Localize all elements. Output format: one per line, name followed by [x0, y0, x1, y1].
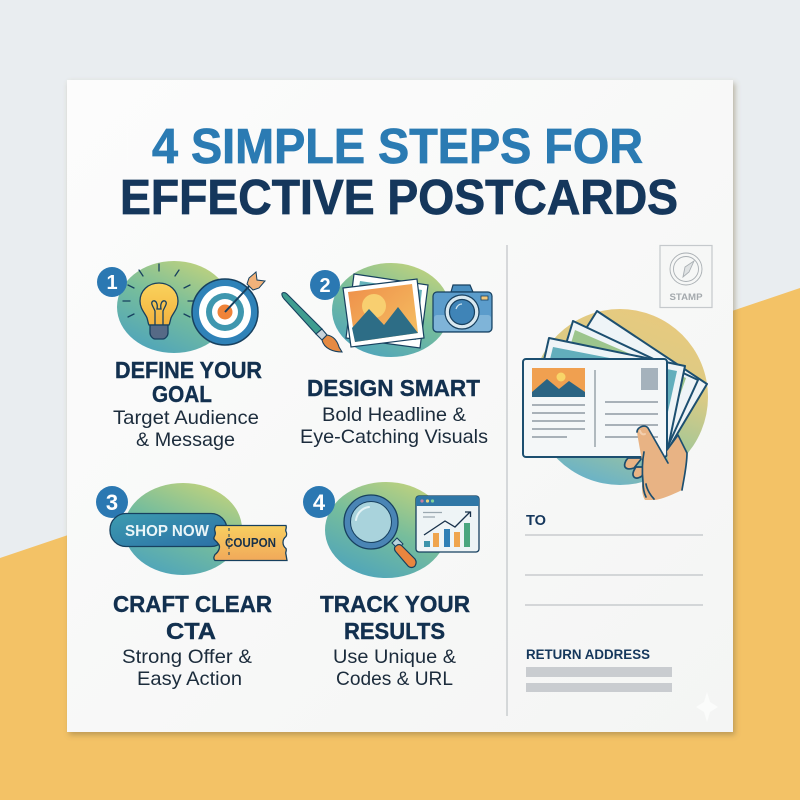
step 1 heading: GOAL: [152, 381, 212, 407]
icon: analytics window: [416, 496, 479, 552]
step 3 number badge: [96, 486, 128, 518]
title line 1: 4 SIMPLE STEPS FOR: [152, 120, 643, 174]
step 4 heading: RESULTS: [344, 618, 445, 644]
step 2 description: Eye-Catching Visuals: [300, 426, 488, 448]
step 1 number badge: [97, 267, 127, 297]
step 1 description: [113, 407, 259, 451]
step 3 background blob: [124, 483, 242, 575]
step 3 number badge: 3: [106, 490, 118, 515]
icon: compass: [670, 253, 702, 285]
address section: [525, 513, 703, 692]
illustration background circle: [532, 309, 708, 485]
front postcard: [523, 359, 667, 457]
step 2 description: [300, 404, 488, 448]
step 4 heading: [320, 591, 470, 644]
icon: shop now button: [110, 514, 227, 546]
step 1 description: & Message: [136, 429, 235, 451]
step 3 description: Easy Action: [137, 668, 242, 690]
step 2 description: Bold Headline &: [322, 404, 466, 426]
title: [120, 120, 678, 225]
background yellow band: [0, 288, 800, 800]
step 3 heading: CTA: [166, 618, 216, 644]
illustration: postcards in hand: [523, 309, 708, 500]
return address bars: [526, 667, 672, 692]
address lines: [525, 535, 703, 605]
step 3: craft clear cta: [96, 483, 287, 690]
step 1 background blob: [117, 261, 231, 353]
hand: [625, 426, 687, 500]
step 2 background blob: [332, 263, 450, 357]
icon: shop now button: SHOP NOW: [125, 523, 210, 540]
icon: paintbrush: [282, 293, 342, 352]
icon: photo stack: [343, 274, 428, 348]
step 4 number badge: 4: [313, 490, 326, 515]
step 4 heading: TRACK YOUR: [320, 591, 470, 617]
to label: TO: [526, 513, 546, 529]
step 2: design smart: [282, 263, 492, 448]
step 4 background blob: [325, 482, 447, 578]
icon: coupon ticket: [214, 526, 287, 560]
stamp label: STAMP: [670, 292, 703, 303]
step 2 heading: DESIGN SMART: [307, 375, 481, 401]
step 2 number badge: [310, 270, 340, 300]
step 1 heading: DEFINE YOUR: [115, 357, 262, 383]
step 2 number badge: 2: [319, 275, 331, 297]
step 1: define your goal: [97, 261, 265, 451]
icon: light bulb: [123, 264, 195, 339]
step 3 description: [122, 646, 252, 690]
step 4 number badge: [303, 486, 335, 518]
fanned postcards: [535, 311, 707, 448]
sparkle mark: [696, 692, 718, 722]
icon: target: [192, 272, 265, 345]
step 1 number badge: 1: [106, 272, 118, 294]
step 3 description: Strong Offer &: [122, 646, 252, 668]
title line 2: EFFECTIVE POSTCARDS: [120, 171, 678, 225]
step 4 description: Codes & URL: [336, 668, 453, 690]
step 1 heading: [115, 357, 262, 407]
icon: magnifying glass: [344, 495, 416, 568]
icon: coupon ticket: COUPON: [225, 536, 276, 550]
icon: camera: [433, 285, 492, 332]
return address label: RETURN ADDRESS: [526, 647, 650, 662]
step 3 heading: [113, 591, 272, 644]
step 1 description: Target Audience: [113, 407, 259, 429]
stamp box: [660, 246, 712, 308]
step 4: track your results: [303, 482, 479, 690]
step 3 heading: CRAFT CLEAR: [113, 591, 272, 617]
step 4 description: [333, 646, 456, 690]
postcard panel: [67, 80, 733, 732]
step 4 description: Use Unique &: [333, 646, 456, 668]
postcard divider: [506, 245, 508, 716]
